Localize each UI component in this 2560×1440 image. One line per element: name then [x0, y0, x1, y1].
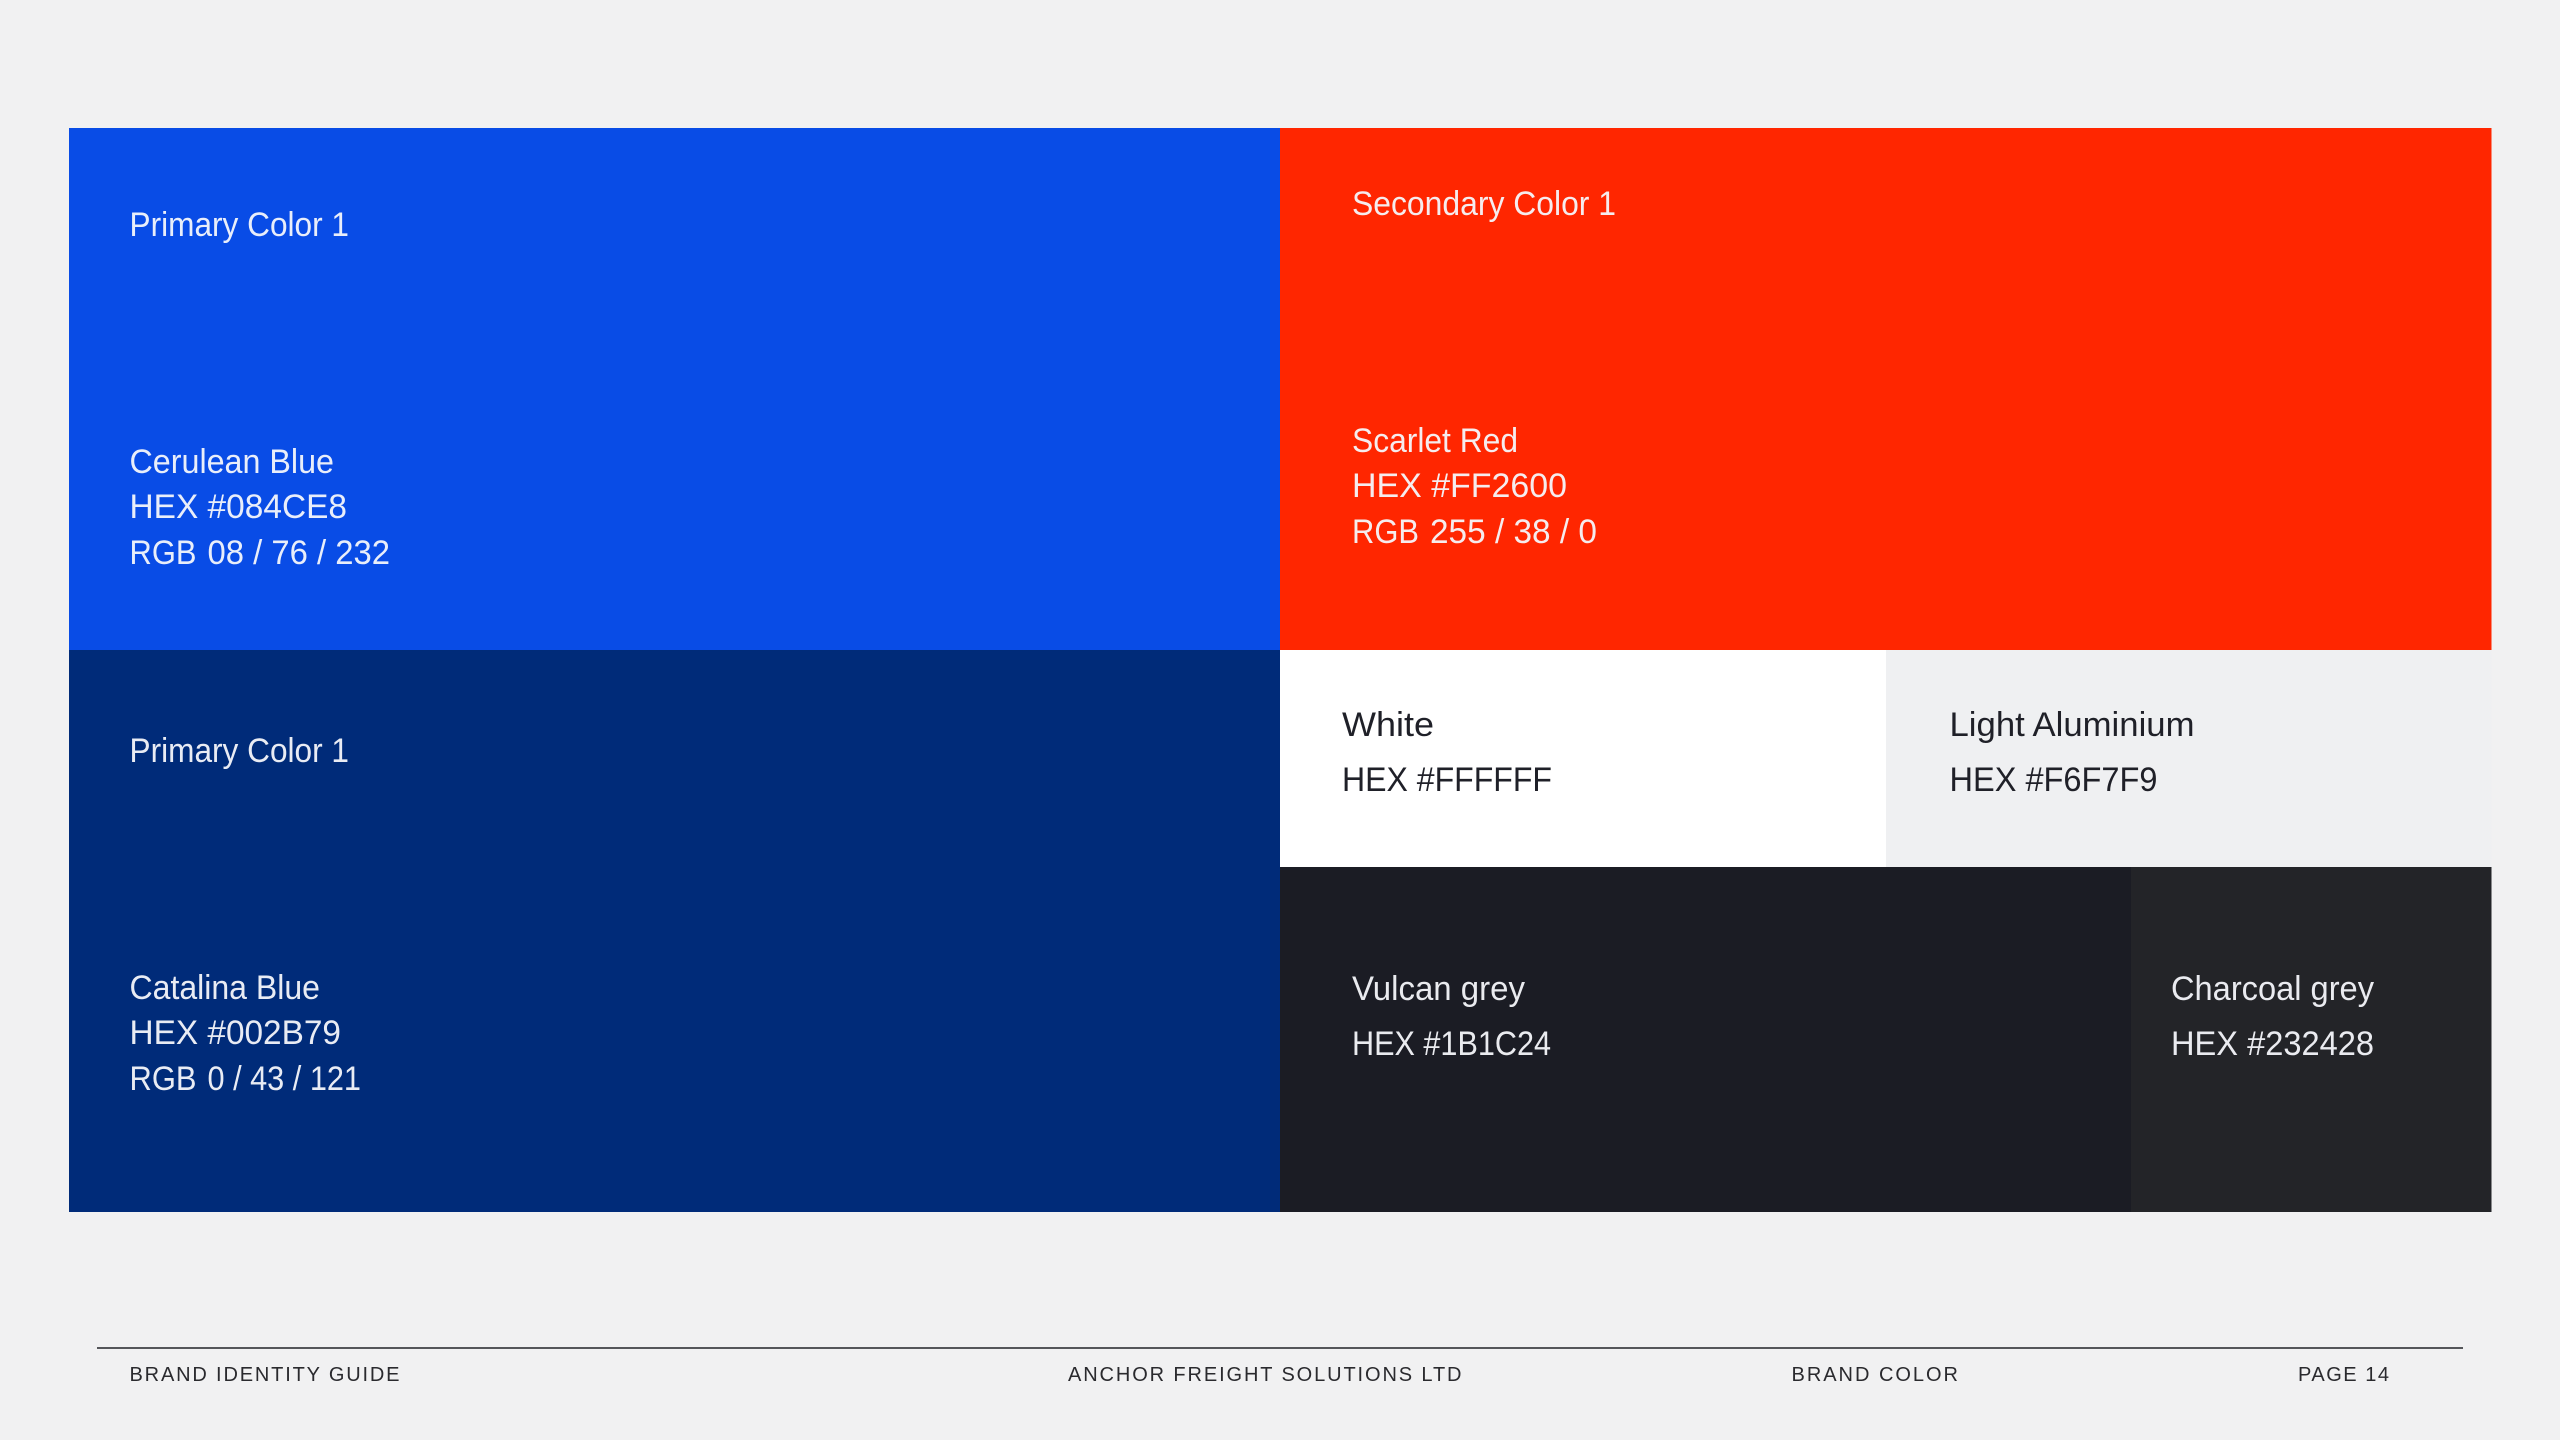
heading: Primary Color 1: Primary Color 1	[130, 206, 349, 244]
text block: Light Aluminium values: Light Aluminium	[1950, 706, 2194, 744]
text block: Cerulean Blue values: Cerulean Blue	[130, 443, 334, 481]
text block: Scarlet Red values: HEX #FF2600	[1352, 467, 1567, 505]
text block: Scarlet Red values: Scarlet Red	[1352, 422, 1518, 460]
text block: Catalina Blue values: Catalina Blue	[130, 969, 320, 1007]
text block: Cerulean Blue values: HEX #084CE8	[130, 488, 347, 526]
text block: Vulcan grey values: HEX #1B1C24	[1352, 1025, 1551, 1063]
text block: White values	[1342, 706, 1552, 799]
text block: Scarlet Red values: RGB	[1352, 513, 1419, 551]
text block: Catalina Blue values	[130, 969, 361, 1098]
text block: Catalina Blue values: 0 / 43 / 121	[208, 1060, 361, 1098]
panel: Scarlet Red secondary color	[1280, 128, 2492, 650]
footer text: section name: BRAND COLOR	[1792, 1364, 1958, 1386]
text block: White values: White	[1342, 706, 1434, 744]
text block: Catalina Blue values: RGB	[130, 1060, 196, 1098]
footer text: page number: PAGE 14	[2298, 1364, 2389, 1386]
footer	[97, 1347, 2463, 1386]
footer text: company name: ANCHOR FREIGHT SOLUTIONS LTD	[1068, 1364, 1462, 1386]
text block: Scarlet Red values: 255 / 38 / 0	[1430, 513, 1597, 551]
heading: Primary Color 1: Primary Color 1	[130, 732, 349, 770]
footer text: guide name: BRAND IDENTITY GUIDE	[130, 1364, 400, 1386]
panel: Cerulean Blue primary color	[69, 128, 1280, 650]
text block: Catalina Blue values: HEX #002B79	[130, 1014, 341, 1052]
text block: Cerulean Blue values: 08 / 76 / 232	[208, 534, 390, 572]
heading: Secondary Color 1: Secondary Color 1	[1352, 185, 1616, 223]
text block: Cerulean Blue values	[130, 443, 390, 572]
text block: Scarlet Red values	[1352, 422, 1597, 551]
text block: Light Aluminium values: HEX #F6F7F9	[1950, 761, 2158, 799]
text block: Light Aluminium values	[1950, 706, 2194, 799]
panel: Charcoal grey swatch	[2131, 867, 2492, 1212]
text block: White values: HEX #FFFFFF	[1342, 761, 1552, 799]
text block: Charcoal grey values	[2171, 970, 2374, 1063]
text block: Vulcan grey values	[1352, 970, 1551, 1063]
panel: Light Aluminium swatch	[1886, 650, 2492, 867]
panel: Catalina Blue primary color	[69, 650, 1280, 1212]
panel: Vulcan grey swatch	[1280, 867, 2131, 1212]
text block: Charcoal grey values: HEX #232428	[2171, 1025, 2374, 1063]
text block: Vulcan grey values: Vulcan grey	[1352, 970, 1525, 1008]
panel: White swatch	[1280, 650, 1886, 867]
text block: Charcoal grey values: Charcoal grey	[2171, 970, 2374, 1008]
text block: Cerulean Blue values: RGB	[130, 534, 196, 572]
